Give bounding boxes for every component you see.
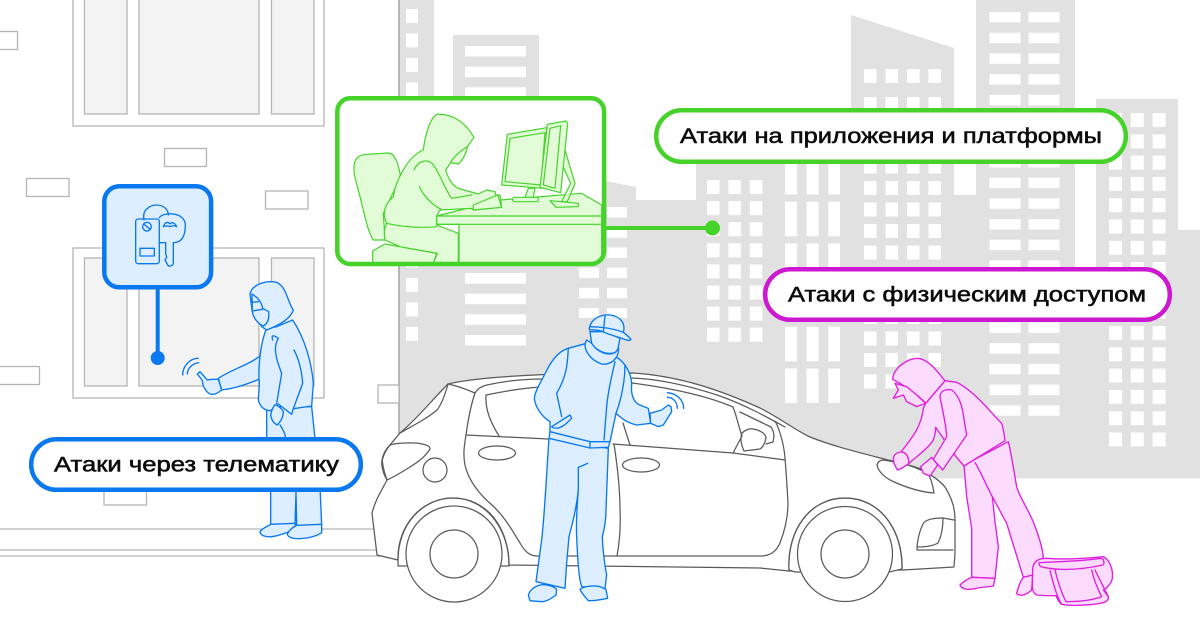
legs	[267, 407, 322, 526]
building wall with windows and bricks	[0, 0, 399, 556]
car outline	[372, 373, 955, 602]
label: physical access attacks	[765, 269, 1170, 320]
hand and key fob	[197, 372, 222, 394]
signal arcs	[183, 358, 199, 375]
keyboard	[473, 195, 502, 210]
label: application and platform attacks	[656, 110, 1126, 162]
jacket	[258, 320, 313, 414]
jacket torso and arm	[534, 343, 651, 448]
face and mask	[252, 294, 269, 326]
hand with fob	[650, 405, 672, 427]
hood	[893, 358, 945, 403]
hood	[250, 282, 293, 330]
seat	[373, 244, 437, 263]
monitor front	[525, 188, 535, 197]
face	[893, 383, 926, 407]
label: physical access attacks: Атаки с физическим доступом	[788, 284, 1146, 306]
hacker silhouette	[384, 114, 502, 263]
head	[590, 332, 620, 353]
city skyline background	[400, 0, 1200, 478]
label: telematics attacks	[31, 439, 361, 490]
icon: key and fob	[136, 205, 185, 266]
jacket and far arm	[902, 381, 1005, 466]
legs	[536, 438, 608, 588]
free hand	[271, 405, 283, 425]
arm reaching	[218, 353, 263, 390]
hooded attacker at the hood (magenta)	[893, 358, 1113, 605]
legs	[964, 442, 1043, 578]
signal arcs	[667, 393, 684, 408]
chair	[354, 153, 401, 240]
callout card: hacker at computer	[337, 98, 720, 264]
label: telematics attacks: Атаки через телематику	[54, 454, 340, 476]
near arm	[933, 390, 967, 470]
hands	[893, 452, 909, 470]
icon card: car keys	[104, 186, 211, 365]
shoes	[528, 585, 557, 602]
cap	[589, 315, 631, 340]
pocket hand	[552, 415, 572, 428]
man with cap and key fob (blue)	[528, 315, 684, 602]
hooded attacker with key signal (blue)	[183, 282, 322, 539]
label: application and platform attacks: Атаки на приложения и платформы	[680, 125, 1102, 148]
scarf	[585, 340, 619, 364]
desk	[437, 193, 602, 263]
monitor side	[562, 150, 575, 202]
shoes	[960, 577, 995, 589]
bag	[1032, 557, 1113, 605]
boots	[260, 523, 296, 537]
